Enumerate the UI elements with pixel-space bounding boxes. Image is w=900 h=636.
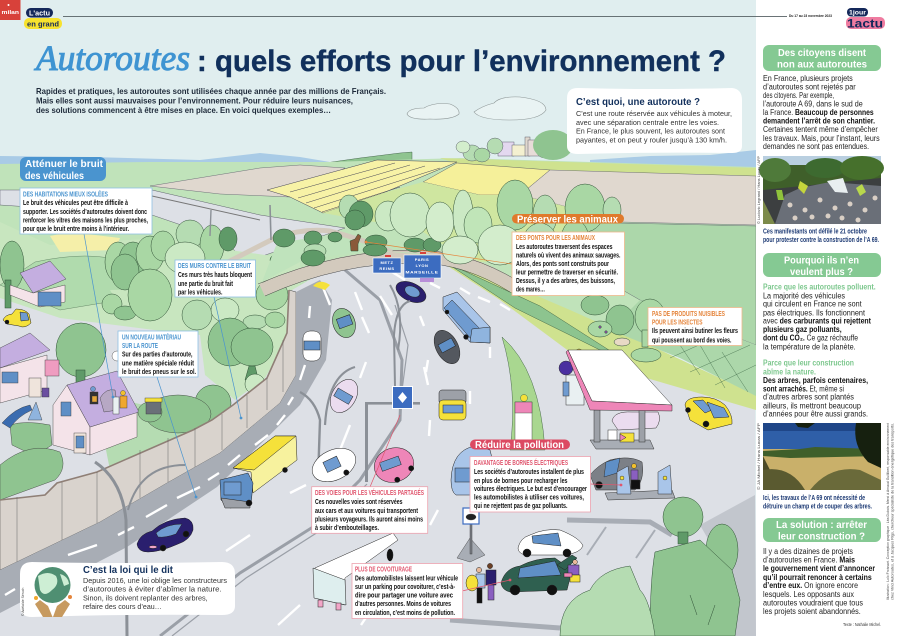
right embankment and meshed slope [443, 262, 756, 410]
right column background [756, 30, 900, 636]
central road dividers [160, 270, 408, 636]
callout: des habitations mieux isolées: DES HABITATIONS MIEUX ISOLÉES [23, 190, 108, 198]
callout: plus de covoiturage [352, 564, 463, 618]
panel: C'est la loi qui le dit: Depuis 2016, une loi oblige les constructeurs [83, 576, 227, 585]
callout: des ponts pour les animaux: Les autoroutes traversent des espaces [516, 242, 612, 251]
main road surface [0, 262, 756, 636]
overhead motorway signs: PARIS [415, 257, 429, 262]
panel: C'est la loi qui le dit: Sinon, ils doivent replanter des arbres, [83, 594, 208, 602]
callout: davantage de bornes électriques: en plus de bornes pour recharger les [474, 476, 568, 485]
rubric label: L'actu en grand [24, 8, 62, 29]
sidebar text: why they refuse: ailleurs, ils mettront beaucoup [763, 401, 862, 410]
road islands in the car park [450, 520, 672, 628]
sidebar text: why they refuse: pas électriques. Ils fonctionnent [763, 308, 866, 317]
sidebar text: why they refuse: Des arbres, parfois centenaires, [763, 376, 868, 385]
overhead motorway signs: LYON [416, 263, 428, 268]
callout: davantage de bornes électriques: Les sociétés d’autoroutes installent de plus [474, 467, 584, 476]
sidebar text: citoyens: Certaines tentent même d’empêcher [763, 125, 878, 134]
sidebar text: why they refuse: sont arrachés. Et, même si [763, 384, 844, 393]
panel: Atténuer le bruit des véhicules heading [20, 157, 106, 182]
village on the horizon [456, 130, 573, 162]
sidebar text: citoyens: En France, plusieurs projets [763, 74, 853, 83]
callout: plus de covoiturage: PLUS DE COVOITURAGE [355, 564, 412, 574]
photo credit: © Ludovic Legrand / Hans Lucas / AFP [757, 155, 761, 224]
sidebar text: citoyens: demandent l’arrêt de son chantier. [763, 117, 875, 126]
callout: des murs contre le bruit: une partie du bruit fait [178, 279, 233, 288]
panel: C'est quoi, une autoroute ?: En France, le plus souvent, les autoroutes sont [576, 127, 726, 136]
callout: des murs contre le bruit: par les véhicules. [178, 288, 222, 296]
callout: des voies pour les véhicules partagés: à subir d’embouteillages. [315, 523, 379, 532]
callout: davantage de bornes électriques [470, 456, 590, 512]
photo caption: travaux [763, 495, 872, 511]
callout: des murs contre le bruit: Ces murs très hauts bloquent [178, 270, 252, 279]
landscape: horizon, water and far hills [0, 150, 756, 345]
sidebar text: solution: le gouvernement vient d’annoncer [763, 564, 875, 573]
icon: globe held by hands [34, 567, 72, 617]
sidebar heading: Des citoyens disent non: Des citoyens disent [778, 47, 866, 59]
dark green carpool car with passengers [466, 555, 580, 603]
callout: des habitations mieux isolées: pour que le bruit entre moins à l’intérieur. [23, 224, 129, 233]
panel: C'est quoi, une autoroute ?: avec une séparation centrale entre les voies. [576, 118, 719, 127]
sidebar text: solution: d’entre eux. On ignore encore [763, 581, 858, 590]
connector lines and dots [84, 234, 622, 591]
sidebar text: citoyens: d’autoroutes sont rejetés par [763, 82, 856, 92]
callout: des habitations mieux isolées: renforcer les vitres des maisons les plus proches, [23, 216, 148, 224]
sidebar heading: Pourquoi ils n'en veulent plus ?: Pourquoi ils n’en [784, 254, 859, 266]
callout: des voies pour les véhicules partagés: aux cars et aux voitures qui transportent [315, 506, 418, 515]
sidebar heading: La solution [763, 518, 881, 542]
title: Autoroutes [34, 38, 190, 78]
sidebar text: why they refuse: d’années pour être aussi grands. [763, 410, 868, 419]
bridge over the motorway [228, 230, 518, 296]
sidebar text: solution: les projets soient abandonnés. [763, 607, 861, 616]
callout: des ponts pour les animaux: Dessus, il y a des arbres, des buissons, [516, 276, 615, 285]
vertical illustration credits [886, 423, 894, 600]
trees above the wildlife bridge [390, 180, 621, 267]
callout: des murs contre le bruit: DES MURS CONTRE LE BRUIT [178, 261, 251, 270]
title: : quels efforts pour l’environnement ? [197, 45, 726, 78]
house with blue garage [10, 261, 66, 307]
photo credit: © JA Michel / Hans Lucas / AFP [757, 422, 761, 490]
street lamps [95, 205, 410, 636]
rubric label: L'actu en grand: L'actu [29, 8, 50, 18]
photo caption: manifestants [763, 228, 879, 244]
callout: davantage de bornes électriques: les automobilistes à utiliser ces voitures, [474, 492, 584, 502]
white lorry at the bottom [313, 533, 398, 610]
noise wall along the road [0, 290, 296, 570]
panel: Réduire la pollution heading: Réduire la pollution [475, 439, 564, 451]
sidebar text: solution: autoroutes voudraient que tous [763, 598, 863, 608]
blue bus behind the pollution callout [451, 446, 495, 495]
sidebar heading: La solution: leur construction ? [778, 530, 865, 542]
wildlife bridge with animals and bushes [262, 195, 441, 282]
sidebar text: citoyens: demandes ne sont pas entendues. [763, 142, 869, 151]
blue coach [443, 292, 490, 343]
garden with blue car and swing [0, 402, 63, 500]
sidebar text: citoyens: des citoyens. Par exemple, [763, 91, 834, 100]
callout: plus de covoiturage: en circulation, c’est moins de pollution. [355, 608, 455, 617]
left lawn [0, 222, 300, 335]
callout: pas de produits nuisibles pour les insectes [648, 308, 742, 346]
callout: un nouveau matériau sur la route [118, 331, 198, 377]
yellow car at right [685, 397, 732, 430]
callout: davantage de bornes électriques: voitures électriques. Le but est d’encourager [474, 484, 587, 493]
panel: C'est la loi qui le dit [20, 562, 235, 617]
callout: des murs contre le bruit [175, 260, 256, 297]
panel: Préserver les animaux heading: Préserver les animaux [517, 213, 618, 225]
house at the left edge [0, 333, 59, 403]
callout: des habitations mieux isolées: supporter. Les sociétés d’autoroutes doivent donc [23, 207, 147, 216]
charging stations with car [590, 458, 675, 500]
motorway cars [303, 277, 466, 420]
sidebar text: citoyens: la France. Beaucoup de personnes [763, 108, 874, 117]
sidebar text: why they refuse: Parce que leur construction [763, 359, 854, 368]
sidebar text: citoyens: les travaux. Mais, pour l’instant, leurs [763, 134, 880, 143]
sidebar text: why they refuse [763, 282, 876, 419]
darker lane next to the wall [0, 280, 332, 613]
vertical illustration credits: Illustration : Loïc Froissart. Conception graphique : Léa Dubois. Merci à Arnaud Guillibert, responsable environnement [886, 423, 890, 600]
house being insulated, with workers on the roof [53, 351, 211, 470]
callout: plus de covoiturage: Des automobilistes laissent leur véhicule [355, 574, 458, 582]
sidebar text: why they refuse: abîme la nature. [763, 367, 816, 376]
petrol station [559, 349, 672, 449]
photo: A69 construction site [763, 423, 881, 490]
sidebar heading: Des citoyens disent non: non aux autoroutes [777, 58, 867, 70]
1jour 1actu logo: 1actu [847, 18, 883, 30]
grey area and trees at bottom right [560, 495, 756, 636]
callout: un nouveau matériau sur la route: UN NOUVEAU MATÉRIAU [122, 332, 181, 342]
sidebar heading: Des citoyens disent non [763, 45, 881, 71]
panel: C'est la loi qui le dit: refaire des cours d’eau… [83, 602, 162, 611]
far road on the left [0, 190, 345, 262]
1jour 1actu logo [846, 8, 885, 30]
motorway toll sign and gantry [365, 386, 420, 482]
clouds [407, 97, 546, 120]
top bar: Milan logo: milan [2, 10, 20, 16]
sidebar text: solution: d’autoroutes en France. Mais [763, 556, 856, 564]
callout: plus de covoiturage: sur un parking pour covoiturer, c’est-à- [355, 582, 455, 591]
author credit: Texte : Nathalie Michel. [843, 622, 881, 627]
sidebar heading: Pourquoi ils n'en veulent plus ?: veulent plus ? [790, 266, 853, 278]
top bar: Milan logo [0, 0, 20, 20]
overhead motorway signs: MARSEILLE [406, 270, 438, 274]
intro text: Rapides et pratiques, les autoroutes sont utilisées chaque année par des millions de Français. [36, 87, 386, 96]
callout: un nouveau matériau sur la route: Sur des parties d’autoroute, [122, 350, 193, 358]
top rule [63, 15, 787, 18]
lorry with yellow trailer [220, 436, 297, 508]
sidebar text: why they refuse: d’autres arbres sont plantés [763, 393, 854, 402]
small yellow car on the local road [3, 309, 31, 327]
callout: des voies pour les véhicules partagés: plusieurs voyageurs. Ils auront ainsi moins [315, 514, 423, 524]
callout: pas de produits nuisibles pour les insectes: qui poussent au bord des voies. [652, 336, 732, 344]
sidebar heading: La solution: La solution : arrêter [776, 519, 867, 531]
callout: plus de covoiturage: d’autres personnes. Moins de voitures [355, 599, 451, 608]
callout: des voies pour les véhicules partagés: Ces nouvelles voies sont réservées [315, 497, 402, 506]
sidebar text: citoyens: l’autoroute A 69, dans le sud de [763, 100, 863, 109]
lane markings [226, 272, 510, 625]
sidebar text: why they refuse: avec des carburants qui rejettent [763, 317, 871, 326]
photo: demonstration against the A69 [759, 156, 884, 224]
sidebar text: why they refuse: La majorité des véhicules [763, 291, 845, 300]
panel: C'est quoi, une autoroute ? [567, 88, 742, 154]
sidebar text: why they refuse: dont du CO₂. Ce gaz réchauffe [763, 334, 858, 343]
callout: des voies pour les véhicules partagés [312, 487, 428, 533]
panel: C'est quoi, une autoroute ?: C’est une route réservée aux véhicules à moteur, [576, 109, 732, 118]
callout: davantage de bornes électriques: DAVANTAGE DE BORNES ÉLECTRIQUES [474, 458, 568, 467]
vertical illustration credits: chez Vinci Autoroutes, et à Jacques Rigo, chercheur spécialiste de la transition énergétique des transports. [890, 423, 894, 600]
callout: des ponts pour les animaux: Alors, des ponts sont construits pour [516, 259, 609, 268]
callout: pas de produits nuisibles pour les insectes: Ils peuvent ainsi butiner les fleurs [652, 326, 738, 335]
sidebar heading: Pourquoi ils n'en veulent plus ? [763, 253, 881, 278]
title [34, 38, 726, 78]
overhead motorway signs: METZ [381, 260, 393, 265]
callout: des voies pour les véhicules partagés: DES VOIES POUR LES VÉHICULES PARTAGÉS [315, 488, 424, 497]
sidebar text: solution [763, 547, 875, 616]
photo caption: travaux: Ici, les travaux de l’A 69 ont nécessité de [763, 495, 865, 502]
callout: des ponts pour les animaux: naturels où vivent des animaux sauvages. [516, 250, 620, 259]
cars near the partage lane [307, 442, 419, 488]
issue date: Du 17 au 23 novembre 2023 [789, 13, 833, 18]
fuel totem on green median [502, 337, 545, 450]
callout: des ponts pour les animaux: leur permettre de traverser en sécurité. [516, 267, 618, 276]
callout: des habitations mieux isolées: Le bruit des véhicules peut être difficile à [23, 198, 129, 207]
sidebar text: solution: qu’il pourrait renoncer à certains [763, 573, 872, 582]
bushes and trees behind the noise wall [0, 220, 290, 421]
callout: des ponts pour les animaux: des mares… [516, 284, 545, 294]
sidebar text: why they refuse: plusieurs gaz polluants, [763, 325, 842, 334]
callout: un nouveau matériau sur la route: SUR LA ROUTE [122, 341, 158, 350]
sidebar text: solution: lesquels. Les opposants aux [763, 590, 854, 599]
callout: un nouveau matériau sur la route: le bruit des pneus sur le sol. [122, 367, 196, 376]
intro text: des solutions commencent à être mises en place. En voici quelques exemples… [36, 106, 331, 115]
panel: C'est la loi qui le dit: d’autoroutes à éviter d’abîmer la nature. [83, 585, 222, 594]
panel: C'est quoi, une autoroute ?: C’est quoi, une autoroute ? [576, 96, 700, 108]
panel: Atténuer le bruit des véhicules heading: des véhicules [25, 170, 84, 182]
callout: plus de covoiturage: dire pour partager une voiture avec [355, 590, 453, 600]
callout: des habitations mieux isolées [20, 188, 152, 234]
sidebar text: why they refuse: la température de la planète. [763, 342, 856, 351]
carpool parking sign [457, 508, 485, 562]
panel: C'est la loi qui le dit: C’est la loi qui le dit [83, 564, 173, 576]
navy sedan [137, 518, 193, 552]
parked white car [518, 530, 583, 557]
panel: Atténuer le bruit des véhicules heading: Atténuer le bruit [25, 158, 103, 170]
callout: davantage de bornes électriques: qui ne rejettent pas de gaz polluants. [474, 501, 568, 510]
sidebar text: why they refuse: qui circulent en France ne sont [763, 300, 862, 309]
rubric label: L'actu en grand: en grand [27, 20, 59, 28]
panel: C'est la loi qui le dit: © Adélaïde Séruch [21, 588, 25, 616]
sidebar text: why they refuse: Parce que les autoroutes polluent. [763, 282, 876, 292]
overhead motorway signs: REIMS [379, 266, 395, 271]
intro text: Mais elles sont aussi mauvaises pour l’environnement. Pour réduire leurs nuisances, [36, 96, 353, 106]
intro text [36, 87, 386, 115]
sidebar text: citoyens [763, 74, 880, 151]
sidebar text: solution: Il y a des dizaines de projets [763, 547, 853, 556]
photo caption: manifestants: Ces manifestants ont défilé le 21 octobre [763, 228, 867, 236]
callout: pas de produits nuisibles pour les insectes: POUR LES INSECTES [652, 318, 703, 326]
callout: des ponts pour les animaux: DES PONTS POUR LES ANIMAUX [516, 233, 595, 242]
callout: un nouveau matériau sur la route: une matière spéciale réduit [122, 358, 194, 368]
callout: pas de produits nuisibles pour les insectes: PAS DE PRODUITS NUISIBLES [652, 309, 725, 318]
flowers and bushes near the roadside [581, 295, 665, 362]
1jour 1actu logo: 1jour [849, 10, 866, 16]
panel: C'est quoi, une autoroute ?: payantes, et on peut y rouler jusqu’à 130 km/h. [576, 135, 727, 144]
overhead motorway signs [373, 252, 441, 282]
callout: des ponts pour les animaux [512, 232, 624, 296]
